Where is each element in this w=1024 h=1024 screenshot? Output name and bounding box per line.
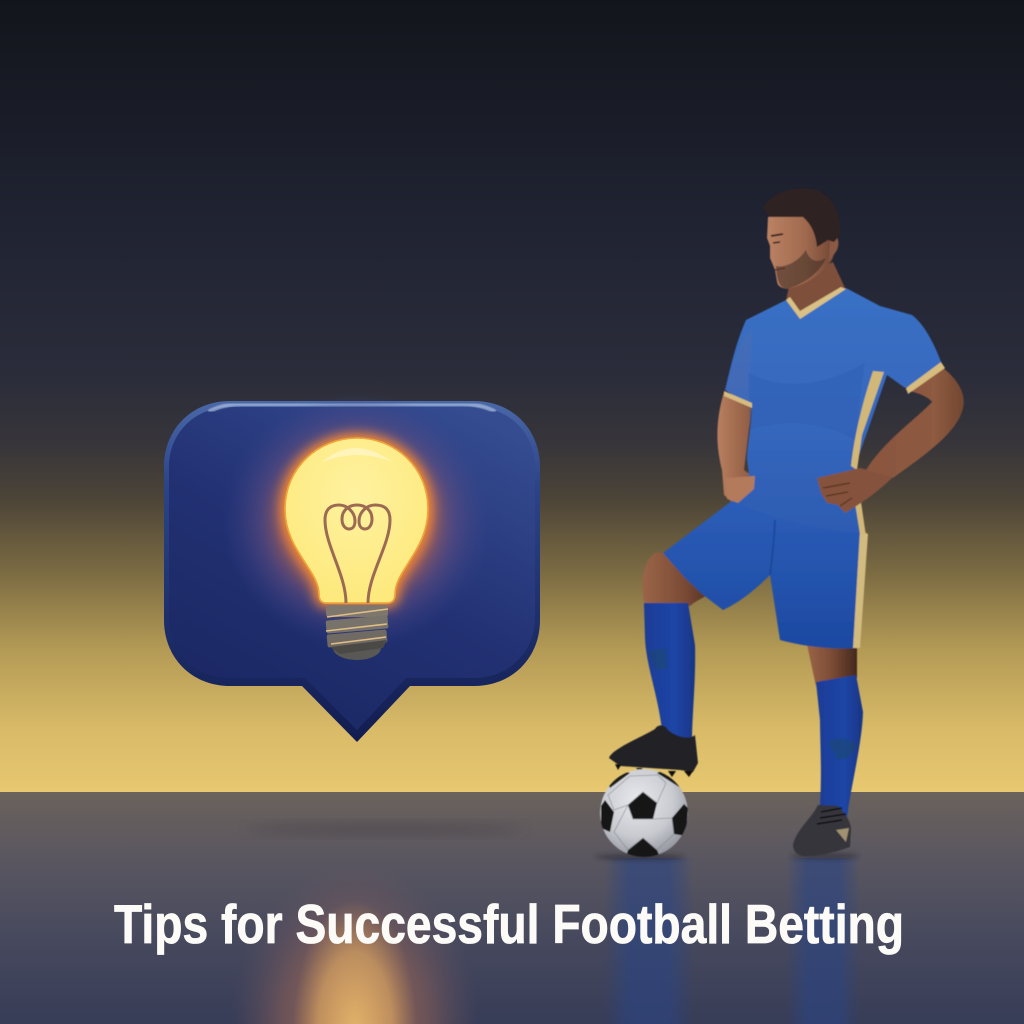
bulb halo <box>222 392 492 648</box>
head <box>763 188 840 289</box>
jersey shading <box>726 330 752 407</box>
hand on hip (viewer left) <box>725 476 755 503</box>
neck <box>786 262 846 320</box>
arm (viewer right) <box>866 362 964 478</box>
speech bubble with light bulb <box>164 392 540 742</box>
floor reflections <box>230 823 860 1024</box>
floor <box>0 792 1024 1024</box>
standing leg boot <box>793 805 851 856</box>
standing leg skin <box>806 640 857 686</box>
bulb screw base <box>326 605 388 660</box>
jersey collar <box>786 287 846 319</box>
bubble highlights <box>210 404 494 411</box>
bulb filament <box>325 505 390 603</box>
standing leg sock <box>816 675 863 818</box>
bubble body <box>164 401 540 742</box>
jersey gold side stripe <box>851 371 884 470</box>
football player <box>600 188 964 857</box>
raised leg sock <box>644 603 695 742</box>
shorts <box>663 500 868 649</box>
jersey <box>725 288 943 533</box>
arm with hand on hip (viewer left) <box>717 392 755 503</box>
background wall <box>0 0 1024 792</box>
hand on hip (viewer right) <box>817 468 893 513</box>
sleeve cuffs <box>724 391 752 408</box>
football <box>600 769 688 857</box>
raised leg boot <box>609 725 698 772</box>
bulb glass <box>285 438 428 603</box>
thigh and knee of raised leg <box>642 550 722 606</box>
